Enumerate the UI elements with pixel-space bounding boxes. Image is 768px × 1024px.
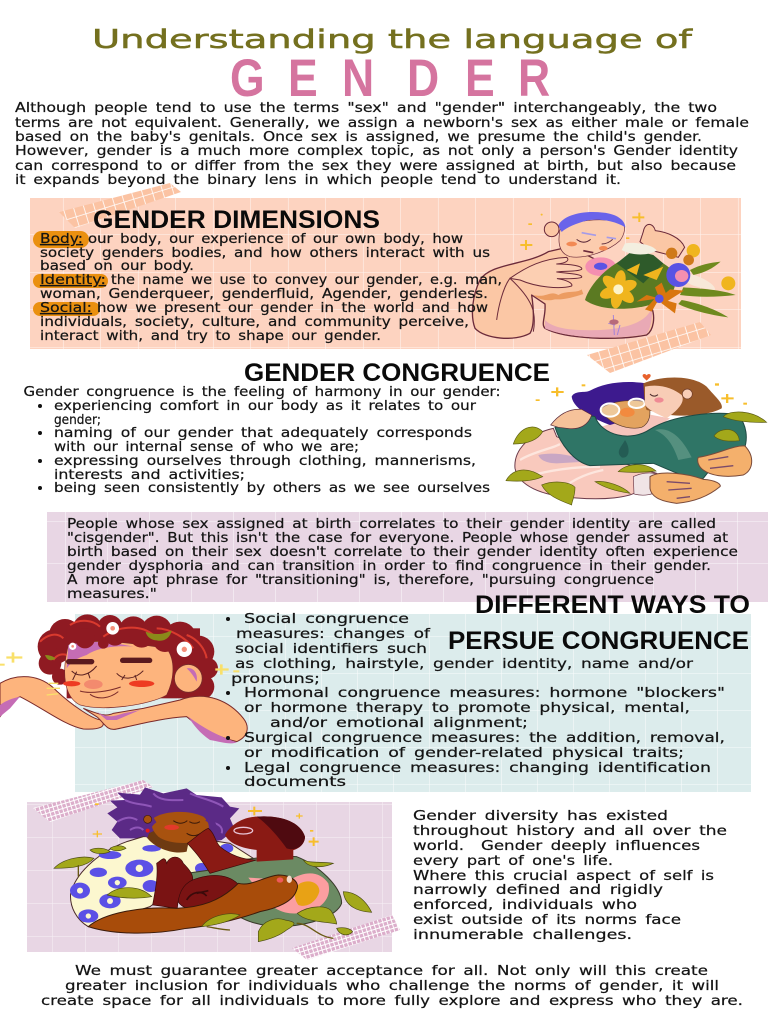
text: dimensions list: woman, Genderqueer, genderfluid, Agender, genderless.: [40, 287, 488, 302]
text: cisgender paragraph: People whose sex assigned at birth correlates to their gender identity are called: [67, 517, 716, 532]
text: dimensions list: Body:: [40, 232, 83, 247]
text: closing statement: create space for all individuals to more fully explore and express who they are.: [41, 994, 743, 1009]
heading: different ways to: DIFFERENT WAYS TO: [475, 591, 750, 619]
text: dimensions list: our body, our experience of our own body, how: [88, 232, 463, 247]
text: dimensions list: [40, 232, 502, 344]
highlight: Body: [33, 231, 89, 248]
text: congruence definition and list: expressing ourselves through clothing, mannerisms,: [54, 454, 476, 469]
tape: bottom right: [587, 322, 711, 373]
text: closing statement: [41, 964, 743, 1009]
highlight: Social: [33, 302, 100, 316]
text: dimensions list: how we present our gender in the world and how: [97, 301, 488, 316]
tape: bottom right: [292, 915, 400, 960]
text: congruence definition and list: experiencing comfort in our body as it relates to our: [54, 399, 477, 414]
intro paragraph: it expands beyond the binary lens in which people tend to understand it.: [15, 173, 621, 188]
text: dimensions list: interact with, and try to shape our gender.: [40, 329, 381, 344]
text: closing statement: We must guarantee greater acceptance for all. Not only will this create: [75, 964, 708, 979]
text: congruence measures list: Social congruence: [244, 612, 409, 627]
panel: cisgender explanation: [47, 512, 768, 602]
text: congruence definition and list: [24, 385, 501, 496]
text: gender diversity paragraph: [413, 809, 727, 943]
text: cisgender paragraph: [67, 517, 738, 602]
illustration: person with flowers in hair: [0, 614, 247, 743]
text: congruence definition and list: with our internal sense of who we are;: [54, 440, 359, 455]
text: congruence measures list: social identifiers such: [235, 642, 427, 657]
text: congruence measures list: or hormone therapy to promote physical, mental,: [244, 701, 690, 716]
text: congruence measures list: measures: changes of: [236, 627, 431, 642]
text: congruence measures list: pronouns;: [231, 672, 320, 687]
text: dimensions list: individuals, society, culture, and community perceive,: [40, 315, 469, 330]
text: gender diversity paragraph: world. Gender deeply influences: [413, 839, 700, 854]
intro paragraph: Although people tend to use the terms "sex" and "gender" interchangeably, the two: [15, 101, 717, 116]
text: congruence measures list: as clothing, hairstyle, gender identity, name and/or: [235, 657, 694, 672]
intro paragraph: terms are not equivalent. Generally, we assign a newborn's sex as either male or female: [15, 116, 749, 131]
text: congruence definition and list: being seen consistently by others as we see ourselves: [54, 481, 490, 496]
text: dimensions list: the name we use to convey our gender, e.g. man,: [111, 273, 502, 288]
text: congruence definition and list: Gender congruence is the feeling of harmony in our gender:: [24, 385, 501, 400]
title word: GENDER: GENDER: [230, 49, 550, 108]
panel: illustration backdrop: [27, 780, 400, 960]
text: gender diversity paragraph: innumerable challenges.: [413, 928, 632, 943]
panel: ways to pursue congruence: [0, 591, 751, 792]
text: gender diversity paragraph: Gender diversity has existed: [413, 809, 668, 824]
intro paragraph: can correspond to or differ from the sex they were assigned at birth, but also because: [15, 159, 736, 174]
text: cisgender paragraph: "cisgender". But this isn't the case for everyone. People whose gender assumed at: [67, 531, 728, 546]
illustration: person holding flowers: [472, 212, 736, 338]
panel: gender dimensions: [30, 183, 741, 373]
text: congruence measures list: and/or emotional alignment;: [270, 716, 528, 731]
text: closing statement: greater inclusion for individuals who challenge the norms of gender, it will: [65, 979, 719, 994]
text: congruence definition and list: naming of our gender that adequately corresponds: [54, 426, 472, 441]
text: cisgender paragraph: gender dysphoria and can transition in order to find congruence in their gender.: [67, 559, 711, 574]
text: congruence measures list: [226, 612, 725, 790]
heading: persue congruence: PERSUE CONGRUENCE: [448, 627, 749, 655]
illustration: couple hugging: [506, 374, 767, 505]
text: dimensions list: based on our body.: [40, 259, 194, 274]
title: Understanding the language of: [92, 25, 693, 55]
illustration: couple embracing: [54, 787, 372, 942]
text: congruence definition and list: gender;: [54, 413, 101, 428]
text: dimensions list: Social:: [40, 301, 92, 316]
text: cisgender paragraph: birth based on their sex doesn't correlate to their gender identity often experience: [67, 545, 738, 560]
text: congruence measures list: Surgical congruence measures: the addition, removal,: [244, 731, 725, 746]
text: gender diversity paragraph: every part of one's life.: [413, 854, 613, 869]
heading: gender congruence: GENDER CONGRUENCE: [244, 359, 550, 387]
text: cisgender paragraph: measures.": [67, 587, 157, 602]
text: gender diversity paragraph: enforced, individuals who: [413, 898, 637, 913]
text: gender diversity paragraph: Where this crucial aspect of self is: [413, 869, 714, 884]
text: congruence measures list: or modification of gender-related physical traits;: [244, 746, 684, 761]
text: congruence measures list: Legal congruence measures: changing identification: [244, 761, 711, 776]
text: congruence definition and list: interests and activities;: [54, 468, 245, 483]
text: congruence measures list: Hormonal congruence measures: hormone "blockers": [244, 686, 725, 701]
text: dimensions list: society genders bodies, and how others interact with us: [40, 246, 490, 261]
intro paragraph: [15, 101, 749, 188]
intro paragraph: based on the baby's genitals. Once sex is assigned, we presume the child's gender.: [15, 130, 702, 145]
intro paragraph: However, gender is a much more complex topic, as not only a person's Gender identity: [15, 144, 738, 159]
highlight: Identity: [33, 274, 108, 288]
heading: gender dimensions: GENDER DIMENSIONS: [93, 206, 380, 234]
text: congruence measures list: documents: [244, 775, 346, 790]
text: cisgender paragraph: A more apt phrase for "transitioning" is, therefore, "pursuing congruence: [67, 573, 654, 588]
text: dimensions list: Identity:: [40, 273, 106, 288]
text: gender diversity paragraph: exist outside of its norms face: [413, 913, 681, 928]
tape: top left: [33, 780, 153, 822]
text: gender diversity paragraph: narrowly defined and rigidly: [413, 883, 663, 898]
text: gender diversity paragraph: throughout history and all over the: [413, 824, 727, 839]
tape: top left: [59, 183, 181, 228]
